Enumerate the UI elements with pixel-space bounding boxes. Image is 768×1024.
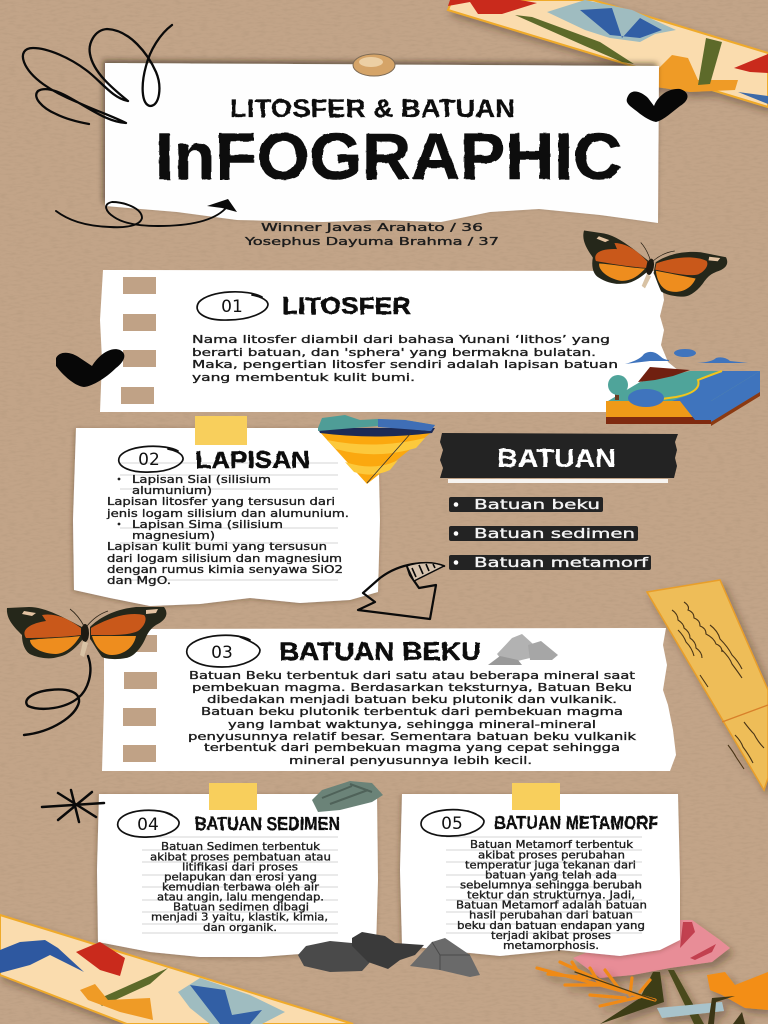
washi tape: right handwriting [647, 580, 768, 790]
illustration: earth wedge [318, 415, 435, 484]
illustration: landform block [606, 349, 760, 426]
panel 02: lapisan [73, 416, 380, 606]
panel 05: batuan metamorf [400, 783, 680, 956]
paper [102, 628, 676, 771]
ruled lines [446, 837, 642, 933]
number badge [187, 635, 260, 667]
number badge: 04 [137, 815, 159, 835]
panel 01: litosfer [100, 270, 690, 412]
number badge [197, 292, 268, 320]
volcano [638, 367, 690, 382]
pill: batuan metamorf: Batuan metamorf [474, 555, 650, 571]
body text [106, 473, 349, 587]
butterfly: left [7, 607, 166, 659]
body text: litifikasi dari proses [182, 860, 298, 874]
body text: berarti batuan, dan 'sphera' yang bermakna bulatan. [192, 346, 596, 359]
body text: yang lambat waktunya, sehingga mineral-mineral [228, 718, 596, 731]
body text: temperatur juga tekanan dari [465, 858, 636, 872]
number badge: 05 [441, 814, 463, 834]
icon: black check heart top [627, 89, 688, 122]
body text: alumunium) [132, 484, 212, 497]
stem [515, 15, 634, 64]
body text: hasil perubahan dari batuan [469, 908, 633, 922]
washi tape: top right floral [448, 0, 768, 107]
body text: Batuan Metamorf adalah batuan [456, 898, 647, 912]
body text: magnesium) [132, 529, 215, 542]
pill: batuan sedimen [449, 526, 638, 542]
banner: batuan: BATUAN [497, 443, 616, 473]
body text: Lapisan litosfer yang tersusun dari [107, 495, 335, 508]
icon: scribble loops [23, 25, 172, 124]
body text: dibedakan menjadi batuan beku plutonik dan vulkanik. [207, 693, 617, 706]
body text: sebelumnya sehingga berubah [460, 878, 642, 892]
authors [244, 221, 499, 248]
heading: main: InFOGRAPHIC [155, 119, 622, 193]
yellow tape [209, 783, 257, 810]
punched holes [121, 277, 156, 404]
body text: jenis logam silisium dan alumunium. [106, 507, 349, 520]
heading: LITOSFER [282, 293, 411, 320]
icon: grey rocks [488, 634, 558, 665]
panel 03: batuan beku [102, 628, 676, 771]
red flower [76, 942, 125, 976]
heading: subtitle: LITOSFER & BATUAN [230, 95, 515, 123]
body text: mineral penyusunnya lebih kecil. [289, 754, 532, 767]
number badge [118, 810, 179, 837]
list: batuan types [449, 497, 651, 571]
icon: curl line [24, 656, 90, 735]
body text: penyusunnya relatif besar. Sementara batuan beku vulkanik [188, 730, 637, 743]
body text: dari logam silisium dan magnesium [107, 552, 342, 565]
sea [672, 371, 760, 401]
pill: batuan metamorf [449, 555, 651, 571]
body text [150, 840, 331, 934]
flower: pink hibiscus [573, 920, 730, 978]
body text: Batuan Metamorf terbentuk [470, 838, 634, 851]
body text: Maka, pengertian litosfer sendiri adalah lapisan batuan [192, 358, 618, 371]
body text: beku dan batuan endapan yang [457, 919, 645, 932]
body text [188, 669, 637, 767]
heading: BATUAN METAMORF [494, 813, 658, 833]
body text: menjadi 3 yaitu, klastik, kimia, [151, 910, 328, 924]
paper [73, 428, 380, 606]
yellow tape [512, 783, 560, 810]
body text: Lapisan Sial (silisium [132, 473, 271, 486]
flower: red poppy [448, 0, 537, 14]
pill: batuan beku: Batuan beku [474, 497, 600, 513]
body text: atau angin, lalu mengendap. [157, 890, 324, 904]
heading: LAPISAN [195, 447, 310, 474]
body text: Batuan beku plutonik terbentuk dari pembekuan magma [201, 705, 623, 718]
body text: akibat proses perubahan [478, 848, 625, 862]
body text: dengan rumus kimia senyawa SiO2 [107, 563, 343, 576]
body text: pelapukan dan erosi yang [164, 870, 317, 884]
bird [0, 940, 84, 973]
banner: batuan [440, 433, 678, 483]
body text: tektur dan strukturnya. Jadi, [467, 888, 635, 902]
body text [456, 838, 647, 952]
icon: hand drawn arrow [358, 563, 444, 619]
body text: terbentuk dari pembekuan magma yang cepat sehingga [204, 741, 620, 754]
heading: BATUAN SEDIMEN [195, 814, 340, 834]
orange flower [80, 984, 153, 1020]
pill: batuan sedimen: Batuan sedimen [474, 526, 635, 542]
body text: dan organik. [203, 921, 277, 934]
body text: Batuan Sedimen terbentuk [161, 840, 321, 853]
ruled lines [142, 837, 338, 933]
body text: yang membentuk kulit bumi. [192, 371, 415, 384]
title card [105, 54, 659, 223]
flower: orange [642, 55, 738, 92]
number badge: 03 [211, 643, 233, 663]
butterfly: top right [575, 230, 728, 305]
punched holes [123, 635, 157, 762]
heading: BATUAN BEKU [279, 638, 481, 666]
body text: pembekuan magma. Berdasarkan teksturnya, Batuan Beku [192, 681, 632, 694]
yellow tape [195, 416, 247, 445]
icon: dark rock cluster [298, 932, 480, 977]
body text: kemudian terbawa oleh air [162, 880, 319, 894]
authors: Yosephus Dayuma Brahma / 37 [244, 235, 499, 248]
number badge: 02 [138, 450, 160, 470]
flowers: bottom right stems and sprig [537, 962, 768, 1024]
icon: green rock [312, 781, 383, 812]
number badge: 01 [221, 297, 243, 317]
clouds [625, 349, 748, 364]
icon: black check heart left [56, 349, 124, 387]
flower: blue leaves [547, 0, 676, 42]
body text: Lapisan kulit bumi yang tersusun [107, 540, 327, 553]
pond [628, 389, 664, 407]
tree [608, 375, 628, 400]
body text: akibat proses pembatuan atau [150, 850, 331, 864]
paper [97, 794, 378, 957]
orange flower [707, 972, 768, 1010]
body text [192, 333, 618, 384]
handwriting marks [672, 602, 764, 769]
stem and leaves [668, 970, 704, 1024]
number badge [421, 810, 484, 836]
icon: asterisk [42, 790, 104, 822]
body text: dan MgO. [107, 574, 171, 587]
number badge [119, 446, 183, 472]
icon: swirl arrow [56, 199, 237, 227]
front and side faces [606, 401, 711, 423]
panel 04: batuan sedimen [97, 783, 378, 957]
torn white paper [105, 63, 659, 223]
ruled lines [120, 463, 338, 580]
top face land [608, 371, 760, 401]
pill: batuan beku [449, 497, 603, 513]
body text: batuan yang telah ada [485, 868, 617, 882]
body text: Batuan sedimen dibagi [173, 900, 309, 914]
stem [96, 968, 168, 1006]
orange sprig [537, 962, 655, 1006]
blue leaves [178, 978, 285, 1024]
authors: Winner Javas Arahato / 36 [261, 221, 483, 234]
washi tape: bottom left floral [0, 915, 353, 1024]
body text: Nama litosfer diambil dari bahasa Yunani ‘lithos’ yang [192, 333, 610, 346]
body text: Batuan Beku terbentuk dari satu atau beberapa mineral saat [189, 669, 636, 682]
blue tape [657, 1002, 724, 1018]
body text: terjadi akibat proses [491, 929, 611, 942]
pin [353, 54, 395, 76]
body text: metamorphosis. [503, 939, 599, 952]
paper [400, 794, 680, 956]
paper [100, 270, 690, 412]
body text: Lapisan Sima (silisium [132, 518, 283, 531]
